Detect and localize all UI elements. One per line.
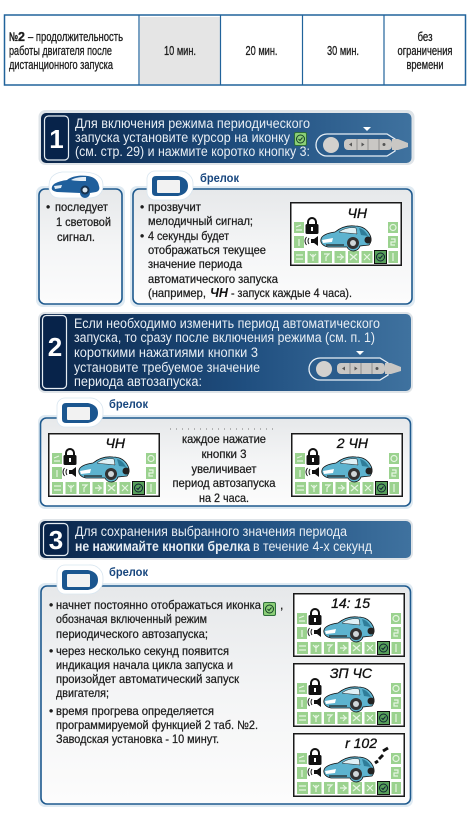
remote response text: значение периода: [148, 257, 242, 271]
icon: remote button fob: [309, 351, 401, 380]
LCD display: 4H: ЧН: [347, 205, 368, 221]
explanation text: кнопки 3: [202, 447, 247, 461]
explanation text: каждое нажатие: [182, 432, 266, 446]
step 3 text: обозначая включенный режим: [56, 612, 207, 626]
banner: step 2: [38, 312, 413, 393]
remote response text: автоматического запуска: [148, 272, 278, 286]
step 3 text: [49, 598, 283, 746]
step 3 text: •: [49, 598, 53, 612]
panel: remote response step 1: [130, 171, 415, 307]
remote response text: •: [140, 229, 144, 243]
icon: remote button fob: [316, 127, 408, 156]
step 3 text: Заводская установка - 10 минут.: [56, 732, 219, 746]
remote response text: - запуск каждые 4 часа).: [231, 286, 352, 300]
LCD display: 14:15: 14: 15: [331, 595, 370, 611]
car panel text: •: [46, 200, 50, 214]
remote response text: [140, 200, 352, 300]
banner: step 2: установите требуемое значение: [74, 360, 260, 375]
car panel text: последует: [55, 200, 108, 214]
step 3 text: начнет постоянно отображаться иконка: [56, 598, 261, 612]
step 3 text: •: [49, 644, 53, 658]
step 3 text: индикация начала цикла запуска и: [56, 658, 233, 672]
table row header: [9, 30, 123, 72]
step 3 text: периодического автозапуска;: [56, 627, 208, 641]
step 3 text: двигателя;: [56, 686, 109, 700]
table values: времени: [406, 58, 444, 72]
banner: step 3: [38, 519, 413, 560]
table values: 20 мин.: [246, 44, 278, 58]
table values: ограничения: [398, 44, 452, 58]
banner: step 3: 3: [49, 525, 63, 555]
LCD display: start: [294, 664, 404, 726]
banner: step 2: 2: [48, 332, 62, 362]
banner: step 1: Для включения режима периодического: [75, 116, 310, 131]
icon: remote: [57, 398, 103, 427]
step 3 text: •: [49, 704, 53, 718]
banner: step 1: (см. стр. 29) и нажмите коротко кнопку 3:: [75, 144, 310, 159]
remote response text: ЧН: [210, 285, 229, 300]
step 3 text: время прогрева определяется: [56, 704, 214, 718]
step 3 text: произойдет автоматический запуск: [56, 672, 240, 686]
icon: car: [49, 172, 103, 198]
remote response text: отображаться текущее: [148, 243, 266, 257]
heading: remote: брелок: [200, 171, 240, 185]
banner: step 1: запуска установите курсор на иконку: [75, 130, 290, 145]
banner: step 2: запуска, то сразу после включения режима (см. п. 1): [74, 330, 375, 345]
explanation text: [170, 429, 278, 505]
icon: remote: [57, 565, 103, 594]
step 3 text: через несколько секунд появится: [56, 644, 229, 658]
heading: remote: брелок: [109, 565, 149, 579]
banner: step 2: периода автозапуска:: [74, 374, 202, 389]
banner: step 1: 1: [49, 124, 64, 154]
explanation text: увеличивает: [192, 462, 257, 476]
banner: step 3: не нажимайте кнопки брелка: [75, 539, 250, 554]
table row header: дистанционного запуска: [9, 58, 113, 72]
icon: remote: [147, 171, 193, 200]
panel: remote step 3: [38, 565, 413, 807]
table row header: работы двигателя после: [9, 44, 112, 58]
LCD display: 2 4H: [292, 434, 402, 496]
banner: step 2: Если необходимо изменить период автоматического: [74, 316, 380, 331]
remote response text: (например,: [148, 286, 206, 300]
step 3 text: программируемой функцией 2 таб. №2.: [56, 718, 258, 732]
table values: без: [418, 30, 433, 44]
remote response text: прозвучит: [148, 200, 201, 214]
icon: timer check: [294, 132, 306, 146]
table values: 30 мин.: [327, 44, 359, 58]
table: engine run time parameter: [4, 15, 466, 85]
heading: remote: брелок: [109, 397, 149, 411]
LCD display: 4H: [291, 203, 401, 265]
remote response text: мелодичный сигнал;: [148, 214, 253, 228]
panel: car response: [36, 172, 125, 307]
LCD display: 4H: [49, 434, 159, 496]
LCD display: start: ЗП ЧС: [330, 665, 373, 681]
car panel text: сигнал.: [57, 230, 95, 244]
highlighted cell: 10 min: [140, 17, 220, 84]
table values: 10 мин.: [164, 44, 196, 58]
car panel text: 1 световой: [56, 215, 111, 229]
table row header: №: [9, 30, 18, 44]
table row header: – продолжительность: [28, 30, 123, 44]
banner: step 3: в течение 4-х секунд: [253, 539, 372, 554]
explanation text: на 2 часа.: [199, 491, 249, 505]
step 3 text: ,: [280, 598, 283, 612]
icon: timer check: [264, 602, 276, 616]
banner: step 3: Для сохранения выбранного значения периода: [75, 524, 347, 539]
panel: remote step 2: [38, 397, 413, 509]
banner: step 2: короткими нажатиями кнопки 3: [74, 345, 258, 360]
LCD display: 14:15: [294, 594, 404, 656]
banner: step 1: [38, 110, 414, 165]
remote response text: 4 секунды будет: [148, 229, 229, 243]
car panel text: [46, 200, 111, 244]
LCD display: warm-up timer: [294, 734, 404, 796]
LCD display: 4H: ЧН: [105, 435, 126, 451]
LCD display: warm-up timer: r 102: [345, 735, 377, 751]
remote response text: •: [140, 200, 144, 214]
explanation text: период автозапуска: [172, 476, 276, 490]
table row header: 2: [18, 30, 25, 44]
LCD display: 2 4H: 2 ЧН: [336, 435, 369, 451]
table values: [164, 30, 452, 72]
